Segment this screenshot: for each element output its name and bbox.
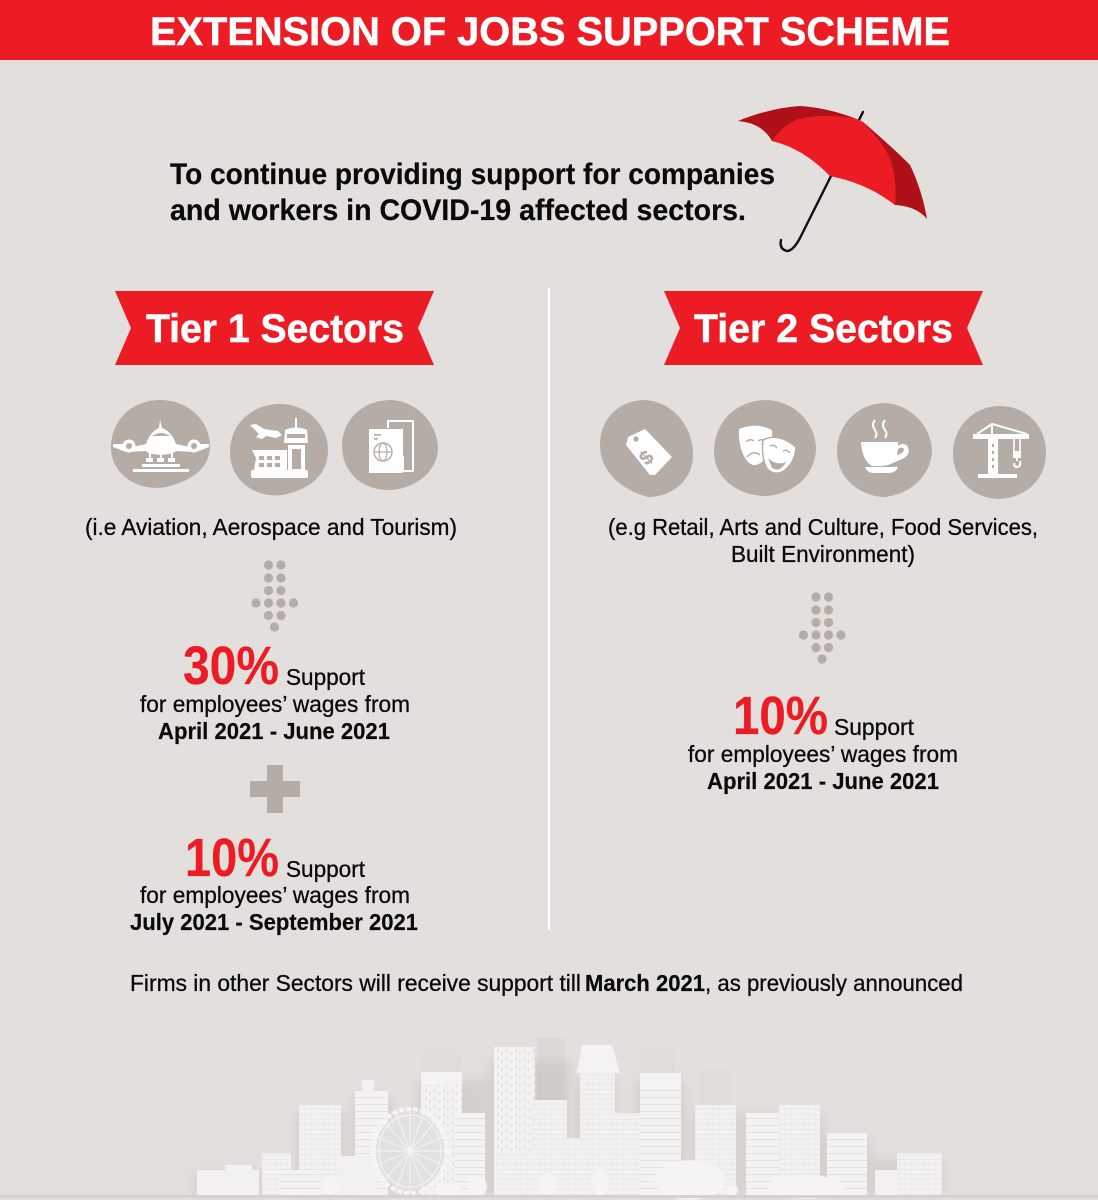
stat: 30 percent support: 30% xyxy=(183,636,279,696)
stat: 10 percent support: July 2021 - September 2021 xyxy=(130,909,418,935)
icon: red umbrella xyxy=(738,106,927,251)
footer note: Firms in other Sectors will receive support till xyxy=(130,970,581,996)
heading: tier 1 banner: Tier 1 Sectors xyxy=(146,307,404,351)
sector caption: (e.g Retail, Arts and Culture, Food Services, xyxy=(608,514,1038,540)
arrow: dotted down arrow xyxy=(799,592,846,664)
illustration: city skyline xyxy=(0,1038,1098,1200)
icon: theatre masks xyxy=(714,400,816,496)
icon: airplane xyxy=(111,400,210,488)
divider xyxy=(548,288,550,930)
icon: price tag xyxy=(600,400,693,497)
title banner: EXTENSION OF JOBS SUPPORT SCHEME xyxy=(150,10,950,54)
intro text: and workers in COVID-19 affected sectors. xyxy=(170,194,746,227)
title banner xyxy=(0,0,1098,60)
stat: 30 percent support: April 2021 - June 2021 xyxy=(158,718,390,744)
stat: 10 percent support: 10% xyxy=(733,686,828,746)
heading: tier 2 banner xyxy=(664,291,983,365)
panel: tier 2 sectors xyxy=(600,291,1046,794)
footer note: , as previously announced xyxy=(705,970,963,996)
stat: 10 percent support xyxy=(130,828,418,935)
sector caption xyxy=(608,514,1038,567)
sector caption: Built Environment) xyxy=(731,541,915,567)
stat: 10 percent support: for employees’ wages from xyxy=(688,741,958,767)
panel: tier 1 sectors xyxy=(85,291,457,935)
ferris wheel xyxy=(373,1109,447,1193)
stat: 30 percent support xyxy=(140,636,410,744)
footer note: March 2021 xyxy=(585,970,705,996)
icon: passport xyxy=(342,400,438,490)
arrow: dotted down arrow xyxy=(251,560,298,632)
stat: 10 percent support: for employees’ wages from xyxy=(140,882,410,908)
stat: 30 percent support: for employees’ wages from xyxy=(140,691,410,717)
stat: 10 percent support: 10% xyxy=(185,828,279,888)
footer note xyxy=(130,970,963,996)
icon: price tag: $ xyxy=(635,446,659,470)
icon: construction crane xyxy=(953,406,1046,499)
heading: tier 2 banner: Tier 2 Sectors xyxy=(694,307,953,351)
stat: 30 percent support: Support xyxy=(286,664,366,690)
stat: 10 percent support: Support xyxy=(286,856,366,882)
stat: 10 percent support: Support xyxy=(834,714,915,740)
icon: airport tower xyxy=(230,404,328,495)
stat: 10 percent support xyxy=(688,686,958,794)
icon: plus sign xyxy=(250,765,300,813)
intro text xyxy=(170,158,775,227)
intro text: To continue providing support for companies xyxy=(170,158,775,191)
heading: tier 1 banner xyxy=(115,291,434,365)
icon: coffee cup xyxy=(837,403,932,497)
stat: 10 percent support: April 2021 - June 2021 xyxy=(707,768,939,794)
sector caption: (i.e Aviation, Aerospace and Tourism) xyxy=(85,514,457,540)
